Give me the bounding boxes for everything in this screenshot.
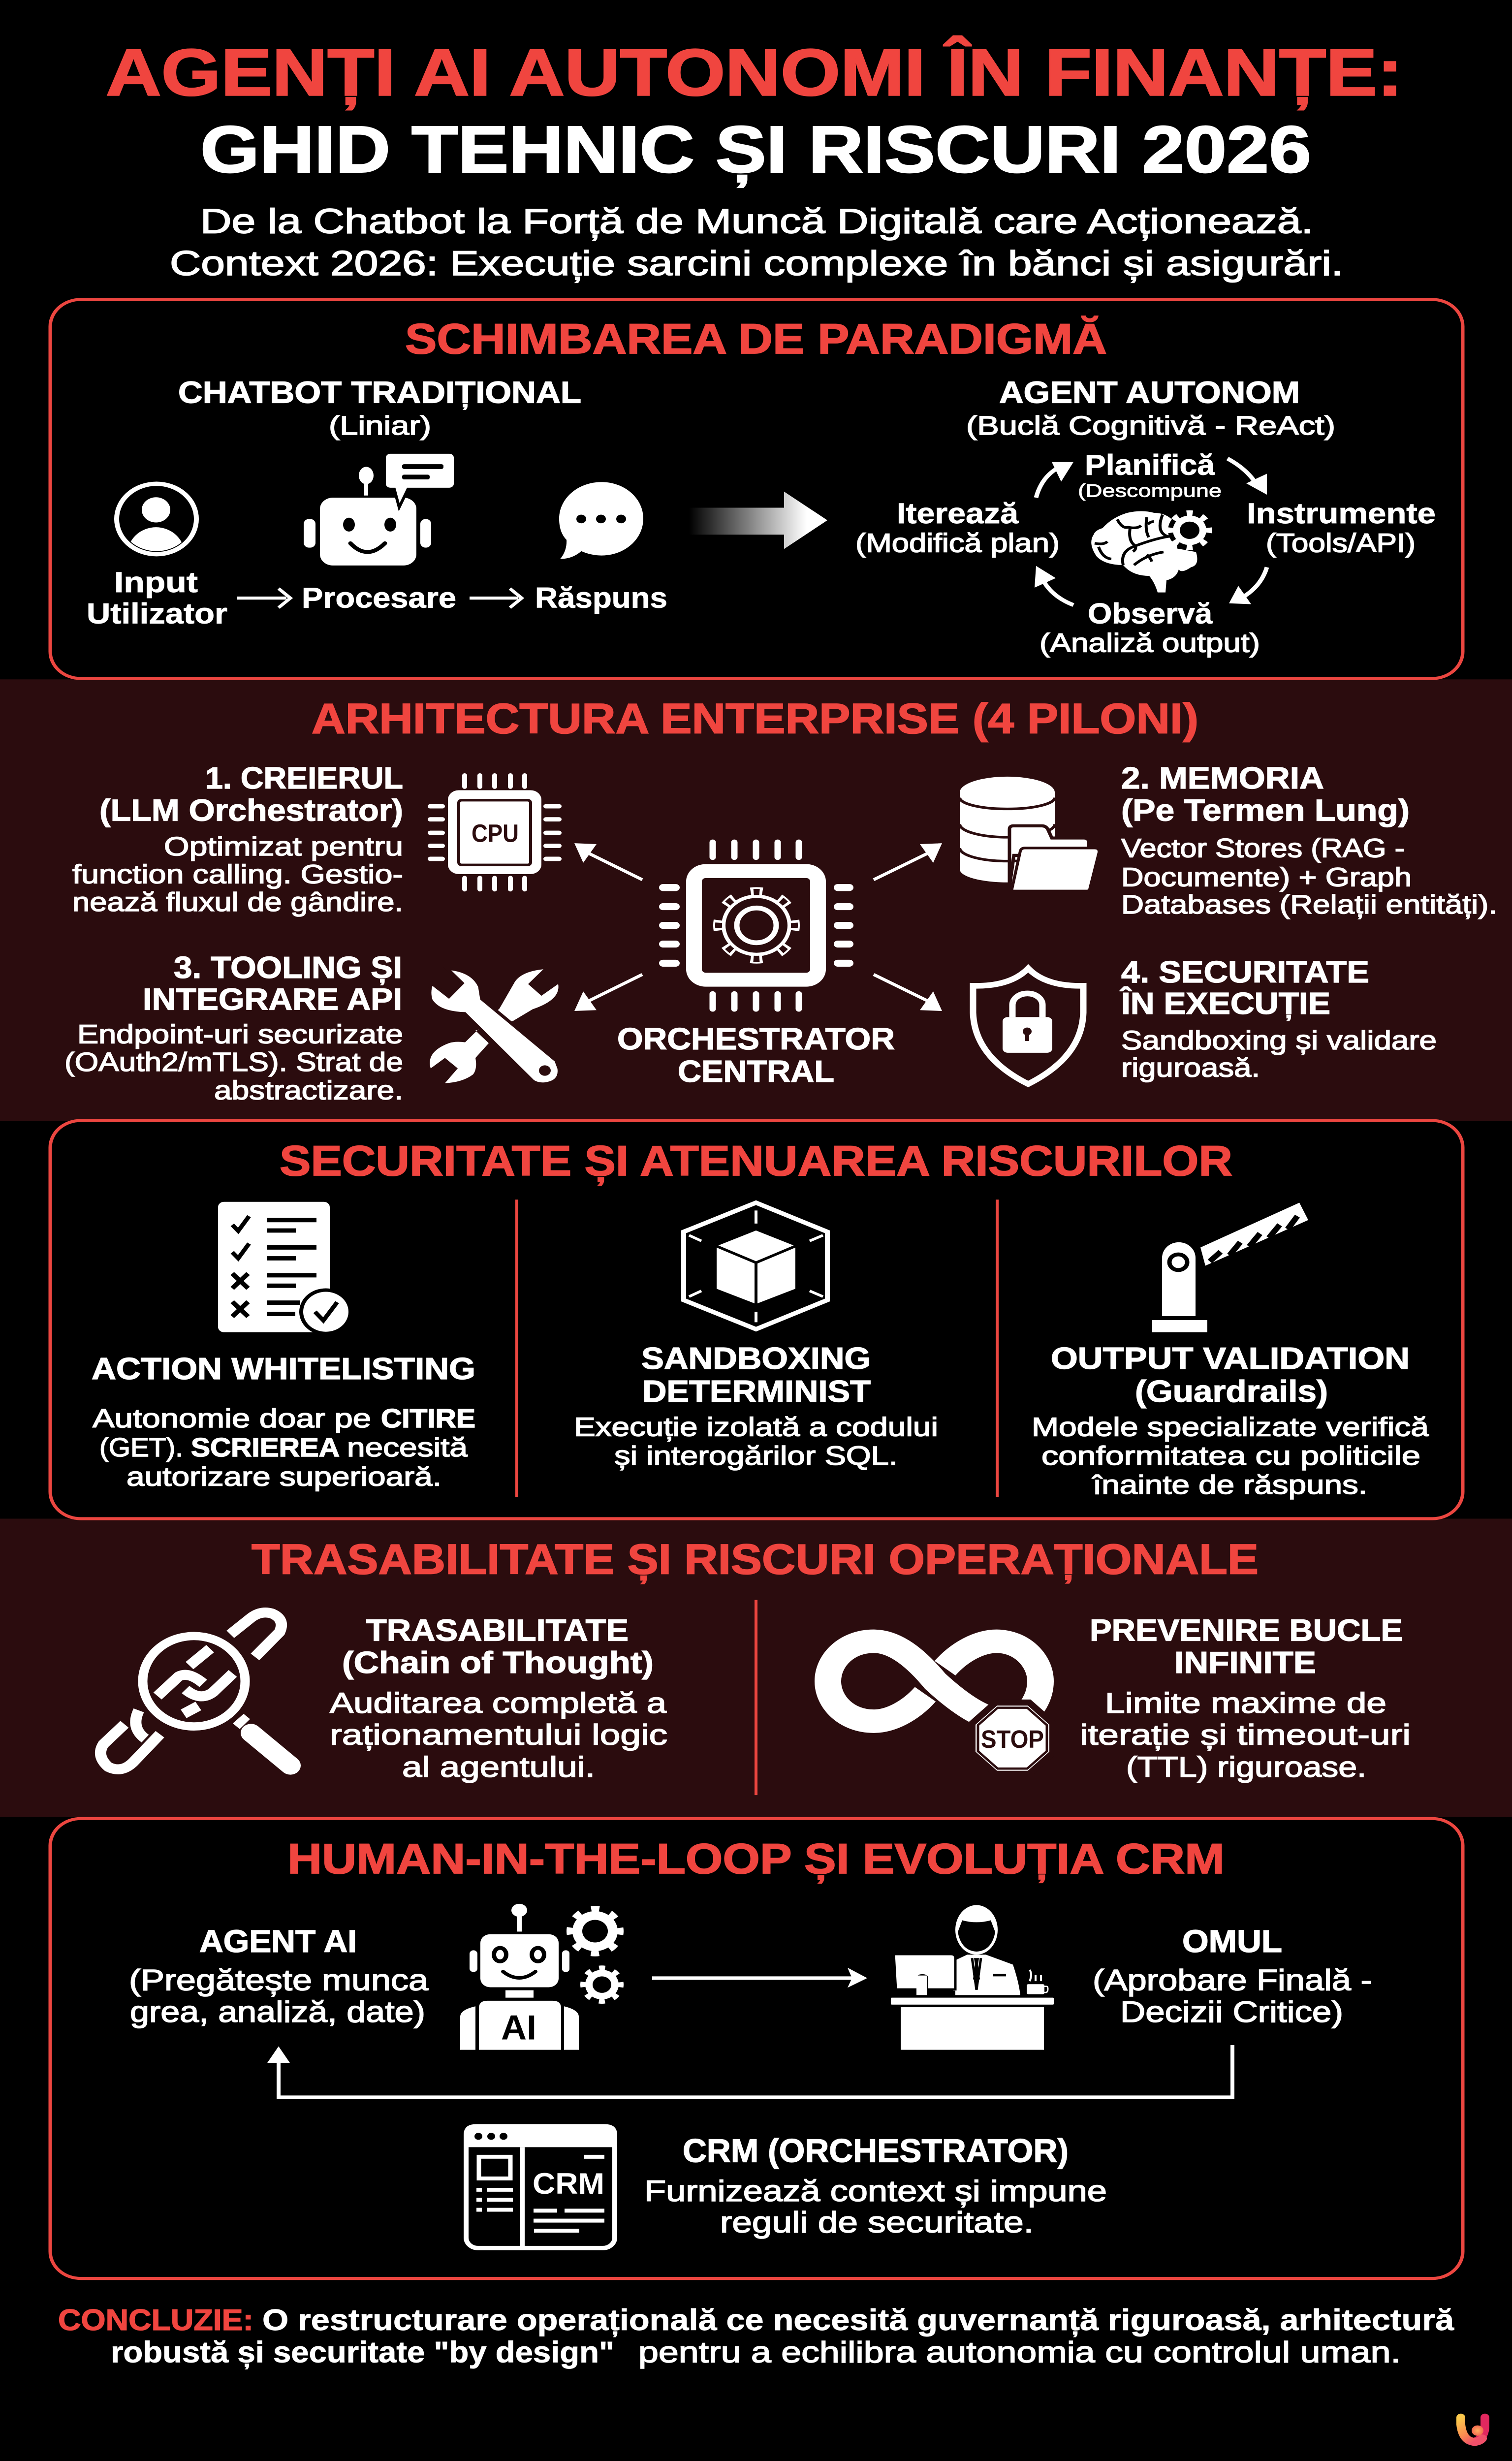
column 1 text: (GET). bbox=[99, 1433, 183, 1462]
human text: OMUL bbox=[1182, 1925, 1282, 1959]
conclusion: O restructurare operațională ce necesită guvernanță riguroasă, arhitectură bbox=[262, 2303, 1454, 2337]
arrow: input to processing bbox=[237, 589, 290, 608]
infinite loop prevention text: (TTL) riguroase. bbox=[1126, 1752, 1366, 1783]
cognitive loop labels: (Modifică plan) bbox=[855, 529, 1060, 558]
pillar 3 text bbox=[64, 950, 403, 1105]
pillar 4 text: 4. SECURITATE bbox=[1121, 955, 1369, 989]
pillar 2 text bbox=[1121, 761, 1497, 919]
crm text: Furnizează context și impune bbox=[644, 2175, 1107, 2208]
pillar 3 text: 3. TOOLING ȘI bbox=[174, 950, 402, 985]
arrow: agent to human bbox=[652, 1968, 867, 1988]
pillar 2 text: (Pe Termen Lung) bbox=[1121, 793, 1410, 827]
column 2 text: DETERMINIST bbox=[642, 1374, 871, 1408]
subtitle bbox=[170, 202, 1343, 283]
pillar 3 text: Endpoint-uri securizate bbox=[77, 1020, 403, 1049]
pillar 1 text: function calling. Gestio- bbox=[72, 860, 403, 889]
labels: linear flow: Răspuns bbox=[535, 582, 667, 614]
icon: infinity with stop sign: STOP bbox=[981, 1725, 1044, 1753]
main title: AGENȚI AI AUTONOMI ÎN FINANȚE: bbox=[106, 36, 1403, 110]
icon: chain under magnifier bbox=[100, 1612, 290, 1769]
labels: linear flow: Procesare bbox=[302, 582, 456, 614]
labels: linear flow bbox=[87, 567, 667, 630]
heading: human in the loop: HUMAN-IN-THE-LOOP ȘI EVOLUȚIA CRM bbox=[287, 1834, 1225, 1884]
traceability text: Auditarea completă a bbox=[330, 1688, 666, 1719]
column heading: chatbot traditional bbox=[178, 375, 581, 441]
label: orchestrator central: ORCHESTRATOR bbox=[617, 1022, 895, 1056]
arrow: transition gradient bbox=[689, 492, 827, 549]
column 1 text: Autonomie doar pe bbox=[93, 1404, 371, 1433]
icon: brain with gear bbox=[1091, 511, 1211, 593]
pillar 4 text: ÎN EXECUȚIE bbox=[1120, 986, 1330, 1021]
cognitive loop labels: Iterează bbox=[897, 498, 1019, 530]
icon: central orchestrator chip bbox=[663, 842, 850, 1009]
cognitive loop labels: Observă bbox=[1088, 598, 1213, 630]
column 3 text: Modele specializate verifică bbox=[1032, 1413, 1429, 1442]
column heading: agent autonom bbox=[966, 375, 1335, 441]
infinite loop prevention text: INFINITE bbox=[1174, 1645, 1316, 1679]
cognitive loop labels: Planifică bbox=[1085, 449, 1215, 481]
column 2 text bbox=[574, 1341, 938, 1471]
infinite loop prevention text: Limite maxime de bbox=[1105, 1688, 1386, 1719]
pillar 3 text: (OAuth2/mTLS). Strat de bbox=[64, 1047, 403, 1077]
infinite loop prevention text: iterație și timeout-uri bbox=[1080, 1719, 1411, 1751]
icon: crossed wrenches bbox=[430, 969, 559, 1084]
infinite loop prevention text bbox=[1080, 1613, 1411, 1783]
labels: linear flow: Utilizator bbox=[87, 598, 227, 630]
arrow: feedback loop bbox=[267, 2045, 1232, 2097]
icon: chatbot robot bbox=[304, 452, 455, 566]
logo bbox=[1461, 2418, 1485, 2442]
heading: schimbarea de paradigma: SCHIMBAREA DE PARADIGMĂ bbox=[405, 315, 1107, 363]
heading: trasabilitate: TRASABILITATE ȘI RISCURI OPERAȚIONALE bbox=[252, 1535, 1259, 1584]
label: orchestrator central: CENTRAL bbox=[678, 1054, 834, 1088]
conclusion: robustă și securitate "by design" bbox=[111, 2335, 614, 2369]
infinite loop prevention text: PREVENIRE BUCLE bbox=[1090, 1613, 1403, 1647]
pillar 2 text: Vector Stores (RAG - bbox=[1121, 834, 1405, 863]
pillar 4 text: riguroasă. bbox=[1121, 1053, 1260, 1083]
crm text bbox=[644, 2133, 1107, 2239]
icon: infinity with stop sign bbox=[828, 1641, 1053, 1774]
pillar 3 text: INTEGRARE API bbox=[143, 982, 402, 1016]
band: arhitectura background bbox=[0, 679, 1512, 1121]
pillar 4 text bbox=[1120, 955, 1437, 1083]
icon: ai robot with gears bbox=[460, 1904, 621, 2050]
main title bbox=[106, 36, 1403, 188]
crm text: CRM (ORCHESTRATOR) bbox=[683, 2133, 1069, 2169]
panel: arhitectura enterprise bbox=[64, 694, 1497, 1105]
panel: human in the loop bbox=[50, 1819, 1463, 2278]
conclusion: CONCLUZIE: bbox=[58, 2303, 253, 2336]
agent ai text: AGENT AI bbox=[199, 1925, 357, 1959]
pillar 1 text: nează fluxul de gândire. bbox=[72, 887, 403, 917]
cognitive loop labels: (Tools/API) bbox=[1266, 529, 1416, 558]
column 3 text: OUTPUT VALIDATION bbox=[1051, 1341, 1410, 1375]
pillar 1 text bbox=[72, 761, 403, 917]
agent ai text: grea, analiză, date) bbox=[130, 1995, 425, 2028]
column 1 text: SCRIEREA bbox=[191, 1433, 340, 1462]
cognitive loop labels: Instrumente bbox=[1247, 498, 1436, 530]
column 2 text: SANDBOXING bbox=[641, 1341, 871, 1375]
main title: GHID TEHNIC ȘI RISCURI 2026 bbox=[200, 113, 1311, 188]
panel: securitate si atenuarea riscurilor bbox=[50, 1121, 1463, 1518]
column heading: chatbot traditional: (Liniar) bbox=[329, 411, 431, 441]
column 1 text: autorizare superioară. bbox=[126, 1462, 441, 1492]
traceability text: al agentului. bbox=[402, 1752, 595, 1783]
column 1 text: necesită bbox=[347, 1433, 468, 1462]
heading: securitate: SECURITATE ȘI ATENUAREA RISCURILOR bbox=[280, 1136, 1232, 1185]
divider bbox=[755, 1600, 757, 1795]
subtitle: Context 2026: Execuție sarcini complexe în bănci și asigurări. bbox=[170, 244, 1343, 283]
column 1 text bbox=[92, 1352, 475, 1492]
icon: sandbox cube bbox=[684, 1202, 827, 1329]
pillar 4 text: Sandboxing și validare bbox=[1121, 1026, 1437, 1055]
icon: human at desk bbox=[891, 1905, 1054, 2050]
column 3 text: (Guardrails) bbox=[1135, 1374, 1328, 1408]
cycle arrows bbox=[1035, 459, 1267, 605]
subtitle: De la Chatbot la Forță de Muncă Digitală care Acționează. bbox=[200, 202, 1313, 240]
pillar 2 text: 2. MEMORIA bbox=[1121, 761, 1324, 795]
agent ai text bbox=[129, 1925, 428, 2028]
column heading: agent autonom: (Buclă Cognitivă - ReAct) bbox=[966, 411, 1335, 441]
icon: barrier gate bbox=[1152, 1202, 1308, 1332]
human text: Decizii Critice) bbox=[1120, 1995, 1343, 2028]
pillar 2 text: Databases (Relații entități). bbox=[1121, 890, 1497, 919]
cognitive loop labels: (Descompune bbox=[1078, 481, 1222, 501]
cognitive loop labels: (Analiză output) bbox=[1040, 629, 1260, 658]
crm text: reguli de securitate. bbox=[720, 2206, 1034, 2239]
column 2 text: Execuție izolată a codului bbox=[574, 1413, 938, 1442]
icon: shield with lock bbox=[973, 969, 1083, 1084]
icon: crm window: CRM bbox=[533, 2167, 604, 2200]
column 1 text: ACTION WHITELISTING bbox=[92, 1352, 475, 1386]
icon: crm window bbox=[464, 2124, 617, 2248]
column 3 text: înainte de răspuns. bbox=[1092, 1470, 1367, 1500]
dividers bbox=[517, 1199, 997, 1497]
pillar 1 text: (LLM Orchestrator) bbox=[99, 793, 403, 827]
agent ai text: (Pregătește munca bbox=[129, 1963, 428, 1997]
panel: trasabilitate si riscuri operationale bbox=[100, 1535, 1411, 1795]
column heading: agent autonom: AGENT AUTONOM bbox=[999, 375, 1300, 410]
band: trasabilitate background bbox=[0, 1518, 1512, 1817]
icon: ai robot with gears: AI bbox=[501, 2008, 536, 2047]
cognitive loop labels bbox=[855, 449, 1436, 658]
traceability text: TRASABILITATE bbox=[366, 1613, 629, 1647]
heading: arhitectura: ARHITECTURA ENTERPRISE (4 PILONI) bbox=[312, 694, 1198, 742]
pillar 1 text: Optimizat pentru bbox=[164, 832, 403, 861]
column 2 text: și interogărilor SQL. bbox=[614, 1441, 898, 1471]
column 3 text bbox=[1032, 1341, 1429, 1500]
panel: schimbarea de paradigma bbox=[50, 299, 1463, 678]
column 3 text: conformitatea cu politicile bbox=[1041, 1441, 1420, 1471]
column 1 text: CITIRE bbox=[381, 1404, 475, 1433]
conclusion: pentru a echilibra autonomia cu controlul uman. bbox=[638, 2335, 1401, 2369]
traceability text bbox=[330, 1613, 667, 1783]
pillar 3 text: abstractizare. bbox=[214, 1076, 403, 1105]
icon: user bbox=[114, 481, 199, 556]
arrows: from center to pillars bbox=[574, 843, 942, 1011]
arrow: processing to response bbox=[470, 589, 522, 608]
pillar 1 text: 1. CREIERUL bbox=[205, 761, 403, 795]
icon: speech bubble bbox=[559, 482, 643, 559]
icon: checklist bbox=[218, 1202, 350, 1333]
traceability text: (Chain of Thought) bbox=[342, 1645, 654, 1679]
human text bbox=[1093, 1925, 1372, 2028]
icon: cpu: CPU bbox=[472, 819, 519, 848]
label: orchestrator central bbox=[617, 1022, 895, 1088]
labels: linear flow: Input bbox=[114, 567, 198, 599]
conclusion bbox=[58, 2303, 1454, 2369]
pillar 2 text: Documente) + Graph bbox=[1121, 863, 1412, 892]
human text: (Aprobare Finală - bbox=[1093, 1963, 1372, 1997]
icon: database with folder bbox=[960, 777, 1099, 891]
column heading: chatbot traditional: CHATBOT TRADIȚIONAL bbox=[178, 375, 581, 410]
icon: cpu bbox=[430, 775, 559, 889]
traceability text: raționamentului logic bbox=[330, 1719, 667, 1751]
